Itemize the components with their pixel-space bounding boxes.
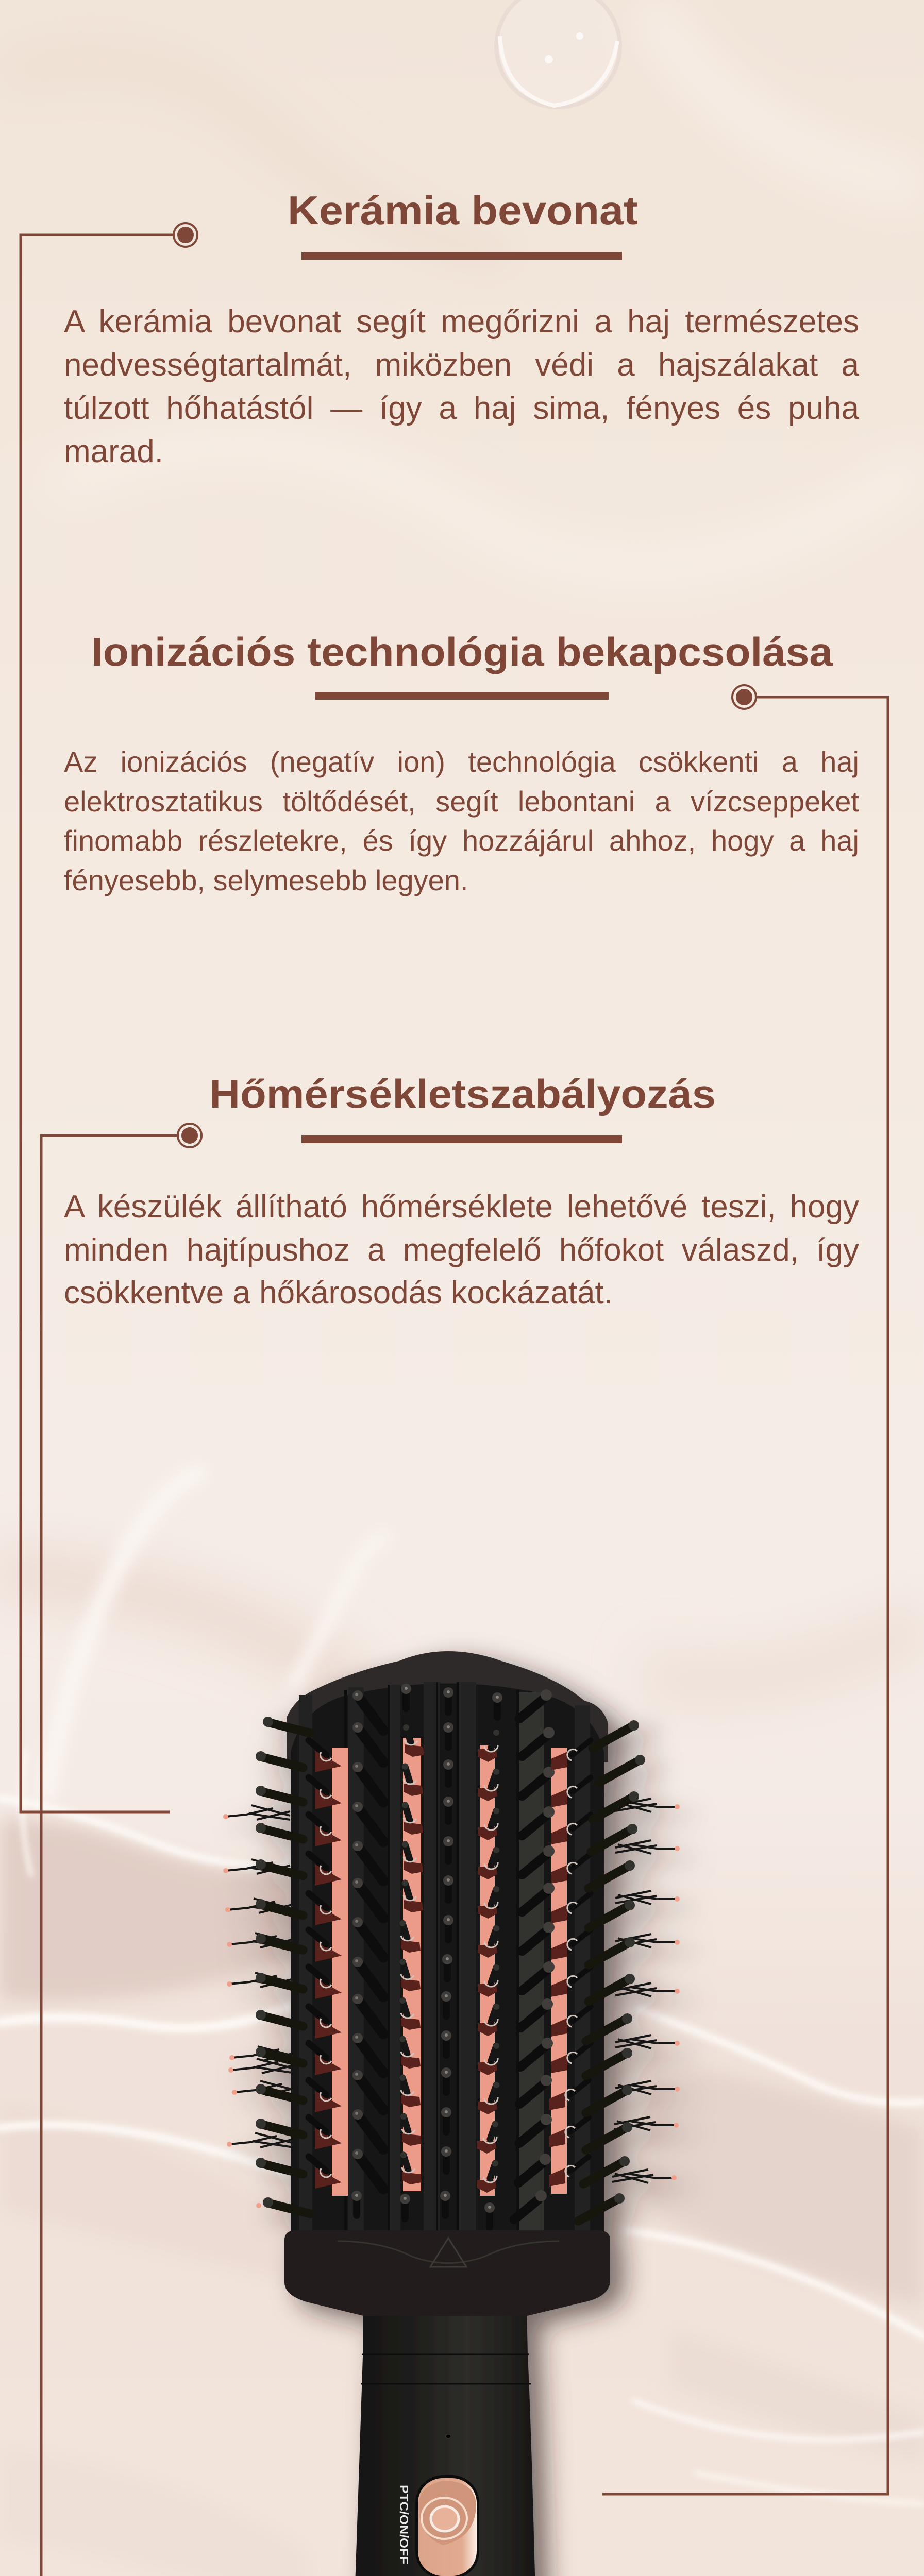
heading 2: Ionizációs technológia bekapcsolása (91, 629, 833, 674)
underline 1 (301, 252, 622, 260)
label: PTC/ON/OFF: PTC/ON/OFF (397, 2485, 411, 2564)
pink heating stripes (332, 1738, 567, 2196)
body text: Kerámia bevonat (64, 304, 859, 469)
white caustic highlights (0, 1752, 924, 2576)
heading 1: Kerámia bevonat (288, 188, 638, 233)
bristles: inner columns (309, 1684, 591, 2227)
connector 3: Hőmérsékletszabályozás (41, 1124, 300, 2576)
body text: Hőmérsékletszabályozás (64, 1189, 859, 1311)
bristle block (291, 1682, 604, 2233)
body text: Kerámia bevonat: marad. (64, 434, 163, 469)
soft white streaks (46, 1473, 384, 1793)
body text: Ionizációs technológia: Az ionizációs (negatív ion) technológia csökkenti a haj (64, 745, 859, 778)
body text: Ionizációs technológia (64, 745, 859, 896)
body text: Hőmérsékletszabályozás: A készülék állítható hőmérséklete lehetővé teszi, hogy (64, 1189, 859, 1225)
connector 1: Kerámia bevonat (21, 223, 197, 1812)
brush head plate (287, 1651, 608, 1762)
bristles: outer left (223, 1717, 310, 2214)
body text: Kerámia bevonat: túlzott hőhatástól — így a haj sima, fényes és puha (64, 391, 859, 426)
body text: Ionizációs technológia: fényesebb, selymesebb legyen. (64, 864, 468, 896)
bristles: outer right (578, 1720, 680, 2221)
body text: Hőmérsékletszabályozás: csökkentve a hőkárosodás kockázatát. (64, 1275, 613, 1311)
bubble (496, 0, 620, 107)
pink caustic bands (0, 1819, 924, 2576)
body text: Hőmérsékletszabályozás: minden hajtípushoz a megfelelő hőfokot válaszd, így (64, 1232, 859, 1267)
underline 3 (301, 1135, 622, 1143)
underline 2 (315, 692, 609, 700)
connector 2: Ionizációs technológia (602, 685, 888, 2494)
body text: Kerámia bevonat: nedvességtartalmát, miközben védi a hajszálakat a (64, 347, 859, 383)
brush handle (343, 2303, 543, 2576)
body text: Ionizációs technológia: finomabb részletekre, és így hozzájárul ahhoz, hogy a haj (64, 824, 859, 857)
heading 3: Hőmérsékletszabályozás (209, 1071, 716, 1116)
body text: Kerámia bevonat: A kerámia bevonat segít megőrizni a haj természetes (64, 304, 859, 340)
power switch (415, 2475, 479, 2576)
body text: Ionizációs technológia: elektrosztatikus töltődését, segít lebontani a vízcseppeket (64, 785, 859, 818)
brush collar (284, 2230, 610, 2316)
